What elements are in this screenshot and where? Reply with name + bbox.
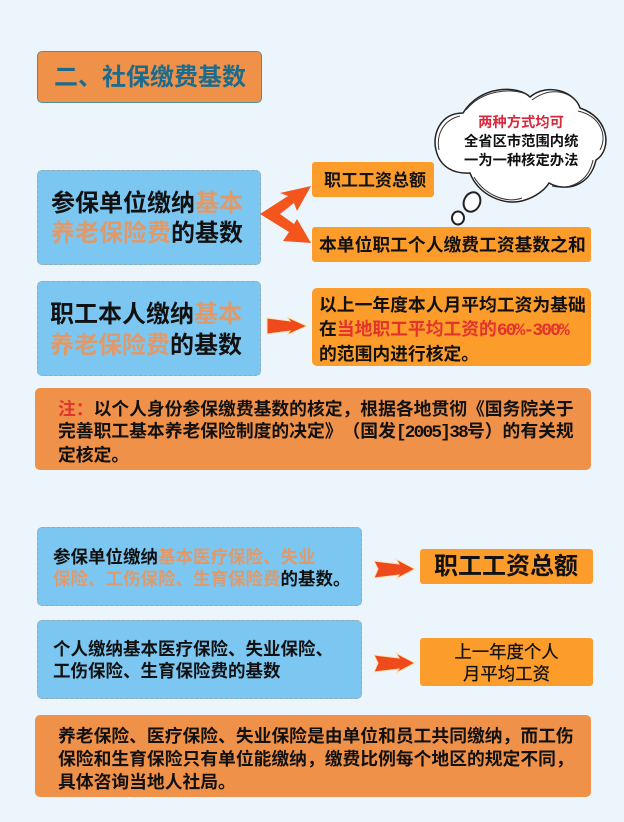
panel: previous year average wage: [420, 638, 593, 686]
panel: total wages: 职工工资总额: [324, 171, 426, 190]
panel: employer pension base: 养老保险费的基数: [51, 220, 243, 247]
panel: employee pension base: 养老保险费的基数: [50, 332, 242, 359]
panel: employer pension base: [37, 170, 261, 265]
panel: note 1: 定核定。: [58, 445, 129, 465]
callout: thought cloud: 两种方式均可: [478, 115, 564, 131]
panel: employee pension base: 职工本人缴纳基本: [50, 301, 242, 328]
panel: previous year average wage: 上一年度个人: [454, 642, 559, 662]
callout: thought cloud: 全省区市范围内统: [464, 134, 578, 150]
panel: 60%-300% rule: [312, 288, 591, 366]
panel: sum of employee bases: [312, 227, 591, 262]
panel: note 1: 注：以个人身份参保缴费基数的核定，根据各地贯彻《国务院关于: [58, 399, 574, 419]
panel: note 2: 保险和生育保险只有单位能缴纳，缴费比例每个地区的规定不同，: [58, 749, 574, 769]
panel: sum of employee bases: 本单位职工个人缴费工资基数之和: [319, 235, 586, 255]
title: 二、社保缴费基数: [54, 64, 246, 91]
panel: employer medical etc. base: [37, 527, 362, 606]
panel: individual medical etc. base: [37, 620, 362, 699]
panel: total wages large: [420, 549, 593, 584]
panel: employer medical etc. base: 保险、工伤保险、生育保险费的基数。: [53, 569, 350, 589]
panel: individual medical etc. base: 工伤保险、生育保险费的基数: [53, 661, 280, 681]
callout: thought cloud: [434, 88, 607, 226]
callout: thought cloud: 一为一种核定办法: [464, 153, 578, 169]
panel: 60%-300% rule: 在当地职工平均工资的60%-300%: [319, 318, 568, 340]
panel: employer medical etc. base: 参保单位缴纳基本医疗保险、失业: [53, 547, 316, 567]
panel: individual medical etc. base: 个人缴纳基本医疗保险、失业保险、: [53, 639, 333, 659]
panel: note 2: [35, 715, 591, 797]
title: [37, 51, 262, 103]
panel: 60%-300% rule: 的范围内进行核定。: [319, 344, 479, 364]
panel: note 1: 完善职工基本养老保险制度的决定》（国发[2005]38号）的有关规: [58, 421, 574, 443]
panel: total wages: [312, 162, 434, 197]
panel: previous year average wage: 月平均工资: [463, 664, 550, 684]
panel: total wages large: 职工工资总额: [434, 553, 578, 580]
panel: employee pension base: [37, 281, 261, 376]
panel: note 2: 具体咨询当地人社局。: [58, 772, 236, 792]
panel: note 1: [35, 388, 591, 470]
panel: 60%-300% rule: 以上一年度本人月平均工资为基础: [319, 295, 586, 315]
panel: note 2: 养老保险、医疗保险、失业保险是由单位和员工共同缴纳，而工伤: [58, 726, 574, 746]
panel: employer pension base: 参保单位缴纳基本: [51, 190, 243, 217]
